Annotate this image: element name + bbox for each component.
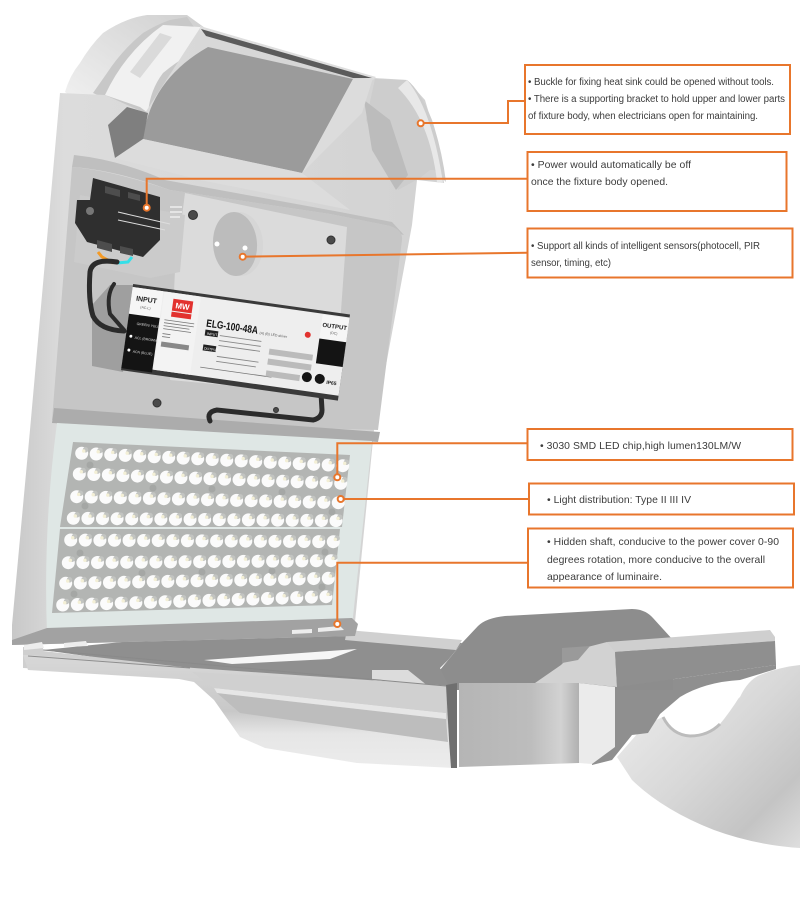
- lower body of luminaire: [23, 650, 454, 768]
- pole and mounting arm: [590, 665, 800, 848]
- callout: hidden shaft: [528, 528, 793, 588]
- callout: light distribution: • Light distribution: Type II III IV: [547, 495, 691, 506]
- recessed compartment: [52, 167, 402, 442]
- callout: buckle and bracket: • Buckle for fixing heat sink could be opened without tools.: [528, 77, 774, 88]
- model label: (A) (B) LED driver: [259, 331, 288, 339]
- leader line: buckle: [418, 101, 524, 126]
- callout: hidden shaft: degrees rotation, more conducive to the overall: [547, 555, 765, 566]
- output label: OUTPUT: [322, 323, 348, 332]
- model label: ELG-100-48A: [206, 318, 259, 337]
- centre junction block: [446, 683, 615, 768]
- callout: buckle and bracket: [525, 65, 790, 134]
- driver mounting bracket: [92, 285, 133, 372]
- screws: [153, 210, 335, 412]
- callout: automatic power off: once the fixture body opened.: [531, 177, 668, 188]
- input label: (AC-L): [140, 305, 151, 311]
- hinge tabs: [24, 626, 344, 650]
- leader line: LED chip: [334, 443, 527, 480]
- callout: hidden shaft: appearance of luminaire.: [547, 572, 662, 583]
- callout: automatic power off: [528, 152, 786, 211]
- input label: ACN (BLUE): [132, 350, 153, 356]
- callout: light distribution: [529, 484, 794, 514]
- callout: intelligent sensors: sensor, timing, etc): [531, 258, 611, 269]
- leader line: power switch: [144, 179, 527, 211]
- coloured wires: [98, 252, 132, 263]
- optical screws on LED board: [70, 462, 336, 598]
- output label: IP65: [326, 380, 337, 387]
- input label: INPUT: [136, 296, 158, 306]
- callout: automatic power off: • Power would automatically be off: [531, 160, 691, 171]
- LED board module: lower: [52, 529, 340, 613]
- terminal block: [75, 178, 182, 257]
- main body shell: [12, 28, 444, 645]
- input label: [121, 287, 171, 374]
- output label: [301, 313, 349, 388]
- callout: buckle and bracket: of fixture body, when electricians open for maintaining.: [528, 111, 758, 122]
- input label: ACL (BROWN): [134, 336, 158, 343]
- sensor mounting hole: [211, 210, 265, 278]
- model label: OUTPUT: [204, 346, 219, 353]
- tray of lower body: [23, 630, 462, 690]
- callout: intelligent sensors: • Support all kinds of intelligent sensors(photocell, PIR: [531, 241, 760, 252]
- LED frame: [46, 423, 372, 634]
- upper body shoulders: [65, 15, 205, 110]
- heat sink opening: [108, 26, 376, 210]
- input label: GREEN/ YELLOW: [136, 322, 166, 330]
- LED board module: upper: [60, 442, 350, 527]
- callout: buckle and bracket: • There is a supporting bracket to hold upper and lower parts: [528, 94, 785, 105]
- right mounting box: [607, 630, 776, 687]
- callout: LED chip: • 3030 SMD LED chip,high lumen130LM/W: [540, 441, 741, 452]
- right buckle: [364, 79, 446, 190]
- metal rim strip: [72, 155, 404, 235]
- leader line: sensor: [240, 253, 527, 260]
- hinge band of upper body: [12, 618, 358, 645]
- callout: intelligent sensors: [528, 228, 792, 278]
- manufacturer panel: [153, 291, 201, 375]
- leader line: light distribution: [338, 496, 528, 502]
- model label: [200, 318, 316, 382]
- power driver: [121, 284, 350, 401]
- stepped bracket: [535, 642, 617, 687]
- leader line: hidden shaft: [334, 563, 527, 627]
- manufacturer panel: MW: [175, 301, 191, 312]
- output label: (DC): [330, 331, 338, 336]
- callout: hidden shaft: • Hidden shaft, conducive to the power cover 0-90: [547, 537, 779, 548]
- LED chips: [63, 450, 346, 605]
- callout: LED chip: [528, 429, 792, 460]
- raised rear housing: [440, 609, 673, 690]
- model label: INPUT: [207, 332, 218, 337]
- black cables: [89, 261, 322, 421]
